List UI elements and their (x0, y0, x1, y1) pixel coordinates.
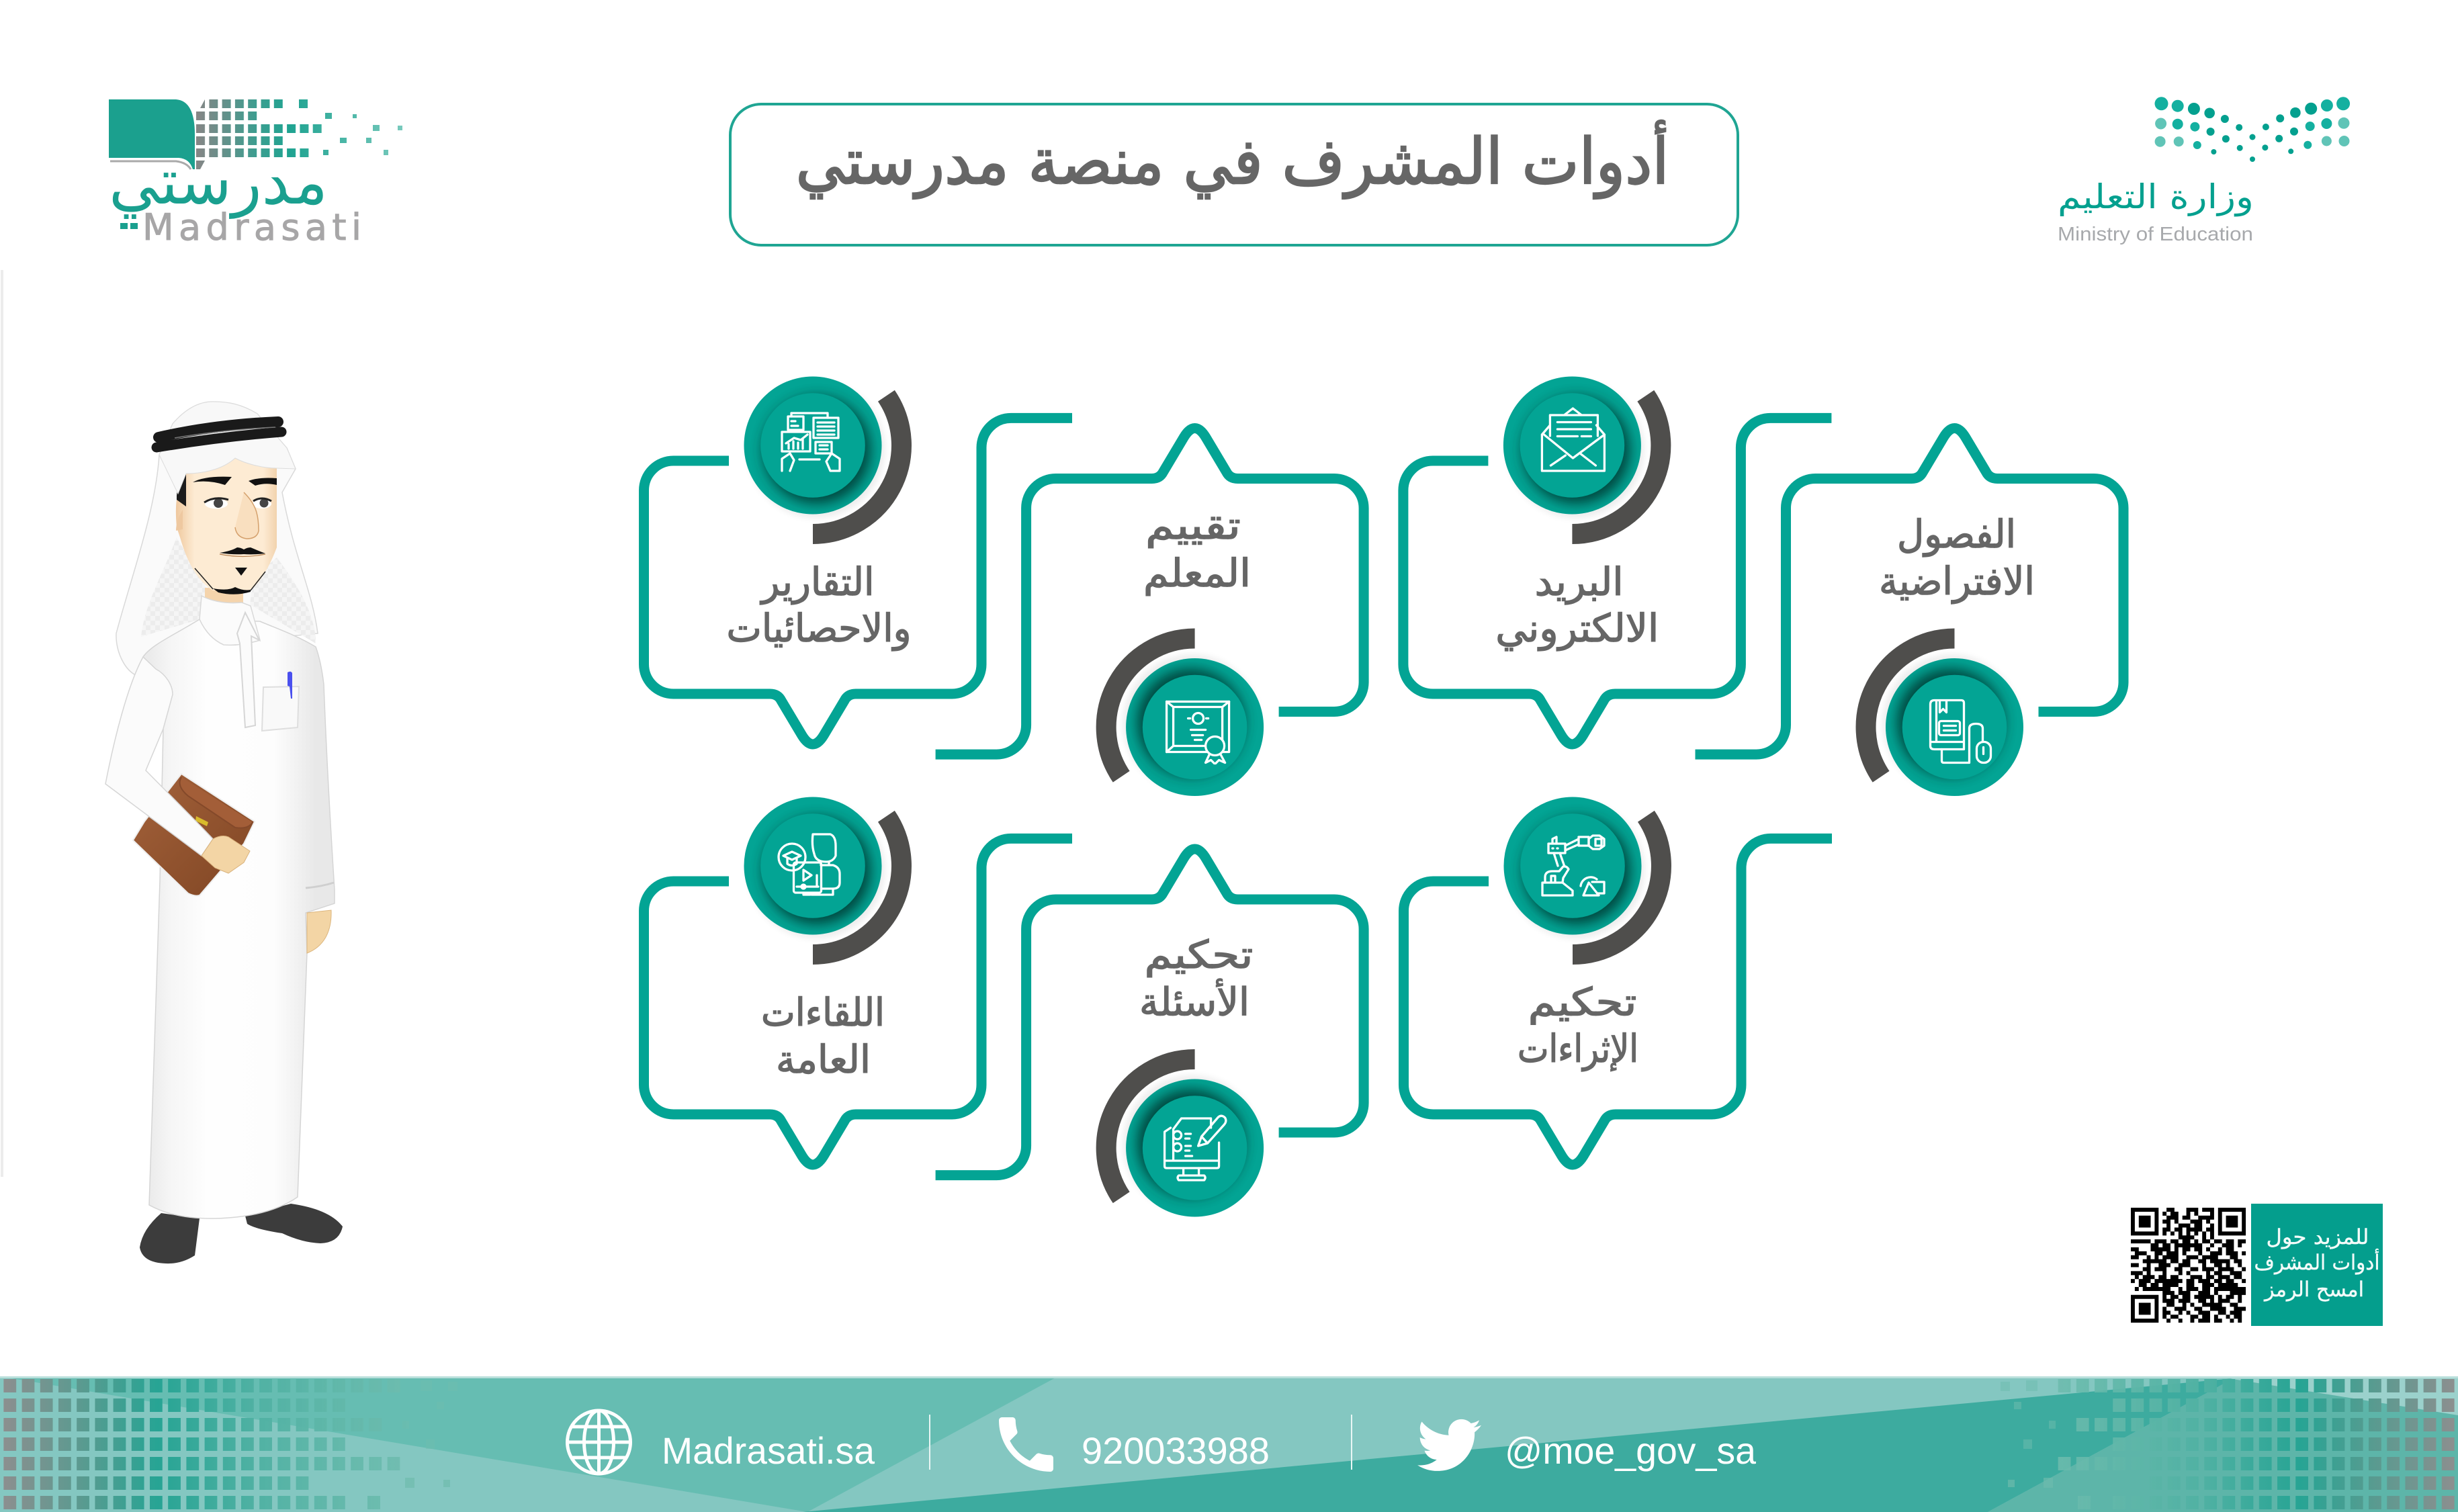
agal black headband (157, 422, 281, 447)
ministry dot mark (2155, 97, 2350, 162)
card frame (1403, 418, 1831, 744)
icon: certificate (1167, 701, 1229, 763)
card: reports and statistics (644, 376, 1072, 744)
hair (177, 474, 186, 506)
logo dots (120, 223, 138, 229)
pen (288, 672, 292, 699)
icon disc with arc (1503, 797, 1661, 954)
face (176, 458, 277, 590)
card: teacher evaluation (936, 429, 1364, 796)
footer pixel grid right (1974, 1370, 2458, 1512)
card: enrichment control (1404, 797, 1832, 1165)
caption line 2: أدوات المشرف (2254, 1249, 2379, 1275)
icon: book and mouse (1931, 700, 1991, 763)
QR code (2131, 1210, 2246, 1321)
phone number: 920033988 (1082, 1429, 1270, 1472)
label: البريد (1535, 560, 1624, 605)
label line 2: الإثراءات (1518, 1027, 1638, 1072)
footer pixel grid left (0, 1370, 484, 1512)
thobe (143, 619, 335, 1218)
logo: Ministry of Education (2058, 97, 2350, 245)
logo book mark (109, 99, 402, 170)
ministry name english: Ministry of Education (2058, 224, 2253, 245)
label line 2: المعلم (1143, 551, 1251, 596)
label: تحكيم (1528, 981, 1637, 1025)
label: تقييم (1145, 504, 1241, 548)
label line 2: والاحصائيات (727, 607, 911, 651)
placket (237, 613, 259, 727)
label line 2: الأسئلة (1139, 979, 1249, 1025)
icon: charts and reports (782, 413, 840, 471)
label line 2: الالكتروني (1495, 607, 1659, 651)
icon disc with arc (744, 376, 902, 534)
ear (176, 510, 183, 531)
neck (205, 588, 243, 605)
eyes (204, 498, 271, 509)
icon disc with arc (744, 797, 902, 954)
caption line 3: امسح الرمز (2263, 1278, 2364, 1302)
card frame (1404, 838, 1832, 1165)
label line 2: العامة (776, 1038, 871, 1082)
character: supervisor in white thobe (105, 402, 343, 1263)
card frame (644, 418, 1072, 744)
ministry name arabic: وزارة التعليم (2058, 177, 2254, 217)
eyebrows (193, 477, 277, 486)
logo: Madrasati (109, 99, 402, 240)
collar (200, 596, 260, 645)
card frame (644, 838, 1072, 1165)
icon: robot arm and shapes (1542, 836, 1604, 895)
icon: twitter bird (1417, 1419, 1481, 1471)
label: الفصول (1897, 513, 2016, 557)
footer band (0, 1370, 2458, 1512)
moustache and beard (213, 547, 265, 594)
website: Madrasati.sa (662, 1429, 875, 1472)
twitter handle: @moe_gov_sa (1505, 1429, 1757, 1472)
icon disc with arc (1106, 1059, 1264, 1217)
card frame (1696, 429, 2123, 754)
icon: teacher and video (779, 834, 840, 895)
headscarf back (116, 402, 318, 674)
icon disc with arc (1866, 638, 2023, 796)
card: email (1403, 376, 1831, 744)
card: virtual classes (1696, 429, 2123, 796)
icon: globe (567, 1411, 630, 1474)
QR caption panel (2251, 1204, 2383, 1326)
caption line 1: للمزيد حول (2267, 1225, 2369, 1249)
icon: phone (999, 1417, 1053, 1472)
icon: monitor, checklist and pencil (1165, 1116, 1226, 1180)
label line 2: الافتراضية (1879, 560, 2035, 604)
right hand (307, 910, 331, 953)
icon disc with arc (1106, 638, 1264, 796)
headscarf front flap (159, 402, 296, 494)
cuff line (306, 883, 334, 888)
logo wordmark arabic: مدرستي (109, 146, 328, 219)
briefcase (133, 774, 255, 896)
pocket (262, 686, 299, 731)
left arm (105, 657, 213, 856)
left hand (202, 836, 250, 873)
icon: open envelope (1542, 408, 1604, 471)
card frame (936, 849, 1364, 1175)
card: question control (936, 849, 1364, 1217)
shoes (140, 1204, 343, 1263)
icon disc with arc (1503, 376, 1661, 534)
nose (235, 492, 259, 539)
label: التقارير (760, 560, 875, 605)
title text: أدوات المشرف في منصة مدرستي (795, 120, 1669, 199)
label: تحكيم (1145, 933, 1254, 977)
card: public meetings (644, 797, 1072, 1165)
label: اللقاءات (761, 991, 885, 1035)
logo wordmark latin: Madrasati (142, 206, 361, 249)
card frame (936, 429, 1364, 754)
title box (730, 104, 1738, 245)
